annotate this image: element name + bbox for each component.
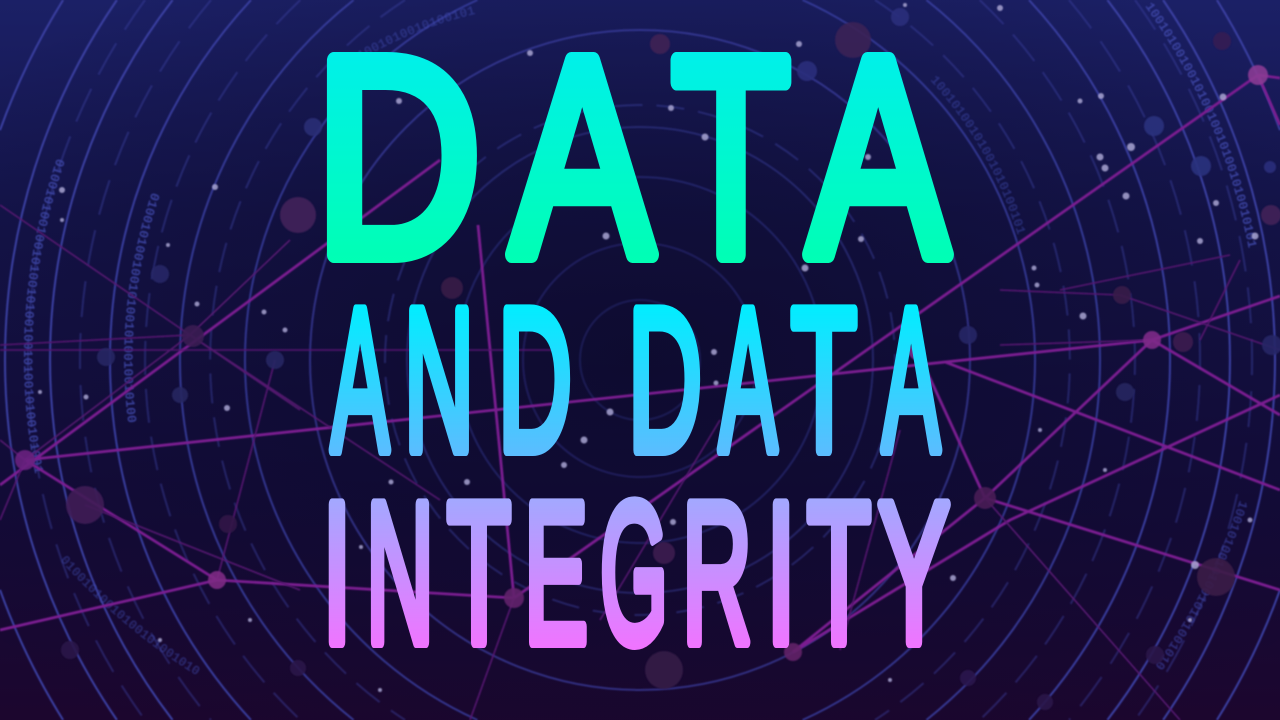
heading line: AND DATA: D [628, 267, 702, 494]
heading line: AND DATA: D [498, 267, 572, 494]
heading line: DATA: A [808, 0, 949, 314]
heading line: AND DATA: T [791, 267, 857, 494]
heading line: DATA: D [315, 0, 481, 314]
faint network lines [0, 205, 1280, 720]
heading line: INTEGRITY: R [682, 462, 752, 685]
heading line: AND DATA: A [719, 267, 777, 494]
heading line: INTEGRITY: I [322, 462, 352, 685]
binary code arcs: 010010100100101001010010010100 [123, 192, 160, 423]
heading line: DATA [315, 0, 949, 314]
binary code arcs: 01001010010010100101001001010010100101001 [23, 159, 65, 474]
heading line: DATA: A [511, 0, 654, 314]
heading line: INTEGRITY: T [807, 462, 871, 685]
binary code arcs: 100101001010010101001010 [1156, 500, 1248, 670]
heading line: INTEGRITY: E [524, 462, 588, 685]
heading line: AND DATA: A [331, 267, 389, 494]
heading line: DATA: T [672, 0, 790, 314]
heading line: INTEGRITY: T [447, 462, 511, 685]
heading line: INTEGRITY: Y [878, 462, 950, 685]
binary code arcs: 1001010010100101 [358, 6, 476, 52]
heading line: INTEGRITY: N [366, 462, 434, 685]
heading line: INTEGRITY: G [600, 462, 668, 685]
title: A [882, 267, 940, 494]
heading line: AND DATA [331, 267, 940, 494]
heading line: AND DATA: N [404, 267, 474, 494]
heading line: INTEGRITY: I [766, 462, 796, 685]
heading line: INTEGRITY [322, 462, 950, 685]
binary code arcs: 1001010010010100100101001010010101 [1145, 2, 1257, 248]
title [315, 0, 950, 685]
binary code arcs: 01001010010100101001010 [61, 556, 200, 675]
binary code arcs: 10010100101001010100101 [930, 76, 1026, 235]
